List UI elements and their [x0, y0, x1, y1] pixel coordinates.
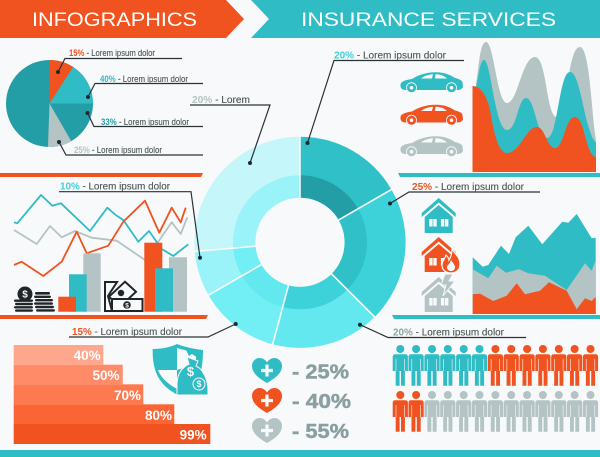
stat: heart 25% — [252, 358, 349, 384]
callout: 25%: 25% - Lorem ipsum dolor — [74, 145, 162, 156]
donut callout: 20% top right: 20% - Lorem ipsum dolor — [334, 50, 446, 62]
line chart — [14, 195, 188, 276]
staircase bars — [14, 345, 210, 444]
footer band — [0, 450, 600, 457]
stat: heart 25%: - 25% — [292, 362, 349, 384]
donut callout: 15%: 15% - Lorem ipsum dolor — [72, 326, 182, 338]
callout: 40%: 40% - Lorem ipsum dolor — [100, 74, 188, 85]
icon: banknotes: $ — [125, 302, 129, 310]
callout: 15% — [56, 48, 182, 74]
header: insurance services — [251, 0, 600, 38]
donut callout: 20% lower right: 20% - Lorem ipsum dolor — [393, 326, 504, 338]
callout: 15%: 15% - Lorem ipsum dolor — [69, 48, 155, 59]
icon: grey car — [400, 136, 463, 157]
stat: heart 40% — [252, 388, 351, 413]
donut callout: 15% — [69, 322, 238, 338]
header: infographics — [0, 0, 244, 38]
jagged area chart — [473, 214, 596, 314]
bar: 99%: 99% — [180, 428, 207, 442]
people row 2 — [393, 391, 598, 432]
section dividers — [0, 173, 600, 319]
bar: 50% — [14, 365, 123, 384]
icon: teal car — [400, 72, 463, 93]
callout: 40% — [86, 74, 203, 99]
icon: house struck by lightning — [422, 274, 456, 312]
icon: orange car — [400, 105, 463, 126]
icon: shield with money bag: $ — [187, 364, 195, 379]
donut callout: 20% top right — [306, 50, 464, 145]
bar: 50%: 50% — [92, 368, 120, 383]
bar: 40%: 40% — [74, 348, 101, 363]
bar: 70%: 70% — [114, 388, 141, 403]
icon: shield with money bag: $ — [196, 379, 202, 389]
icon: house on fire — [422, 237, 460, 273]
icon: house — [422, 198, 456, 233]
donut callout: 10% — [59, 180, 202, 260]
icons: houses — [422, 198, 460, 312]
callout: 33%: 33% - Lorem ipsum dolor — [101, 117, 189, 128]
stat: heart 40%: - 40% — [292, 391, 351, 413]
icon: banknotes — [105, 282, 142, 311]
bar: 99% — [14, 424, 210, 444]
icon: coins — [14, 286, 55, 312]
pie callouts — [56, 48, 203, 156]
donut callout: 20% lorem: 20% - Lorem — [192, 94, 250, 106]
icon: shield with money bag — [153, 344, 208, 395]
donut chart — [194, 136, 406, 348]
callout: 25% — [57, 140, 203, 156]
callout: 33% — [86, 111, 203, 128]
smooth area chart — [472, 42, 596, 172]
icons: cars — [400, 72, 463, 157]
icon: coins: $ — [22, 290, 28, 300]
stat: heart 55% — [252, 418, 349, 443]
bar: 40% — [14, 345, 103, 365]
donut callout: 25%: 25% - Lorem ipsum dolor — [412, 181, 524, 193]
donut callout: 10%: 10% - Lorem ipsum dolor — [60, 180, 170, 192]
people row 1 — [393, 345, 598, 386]
header: infographics: INFOGRAPHICS — [32, 9, 197, 31]
bar: 70% — [14, 384, 143, 404]
donut callout: 20% lorem — [190, 94, 270, 165]
bar: 80%: 80% — [145, 408, 172, 423]
bar chart — [58, 243, 187, 312]
pie chart — [6, 60, 93, 147]
stat: heart 55%: - 55% — [292, 421, 349, 443]
donut callout: 25% — [388, 181, 540, 206]
header: insurance services: INSURANCE SERVICES — [301, 9, 556, 31]
donut callout: 20% lower right — [358, 323, 526, 338]
bar: 80% — [14, 404, 174, 424]
